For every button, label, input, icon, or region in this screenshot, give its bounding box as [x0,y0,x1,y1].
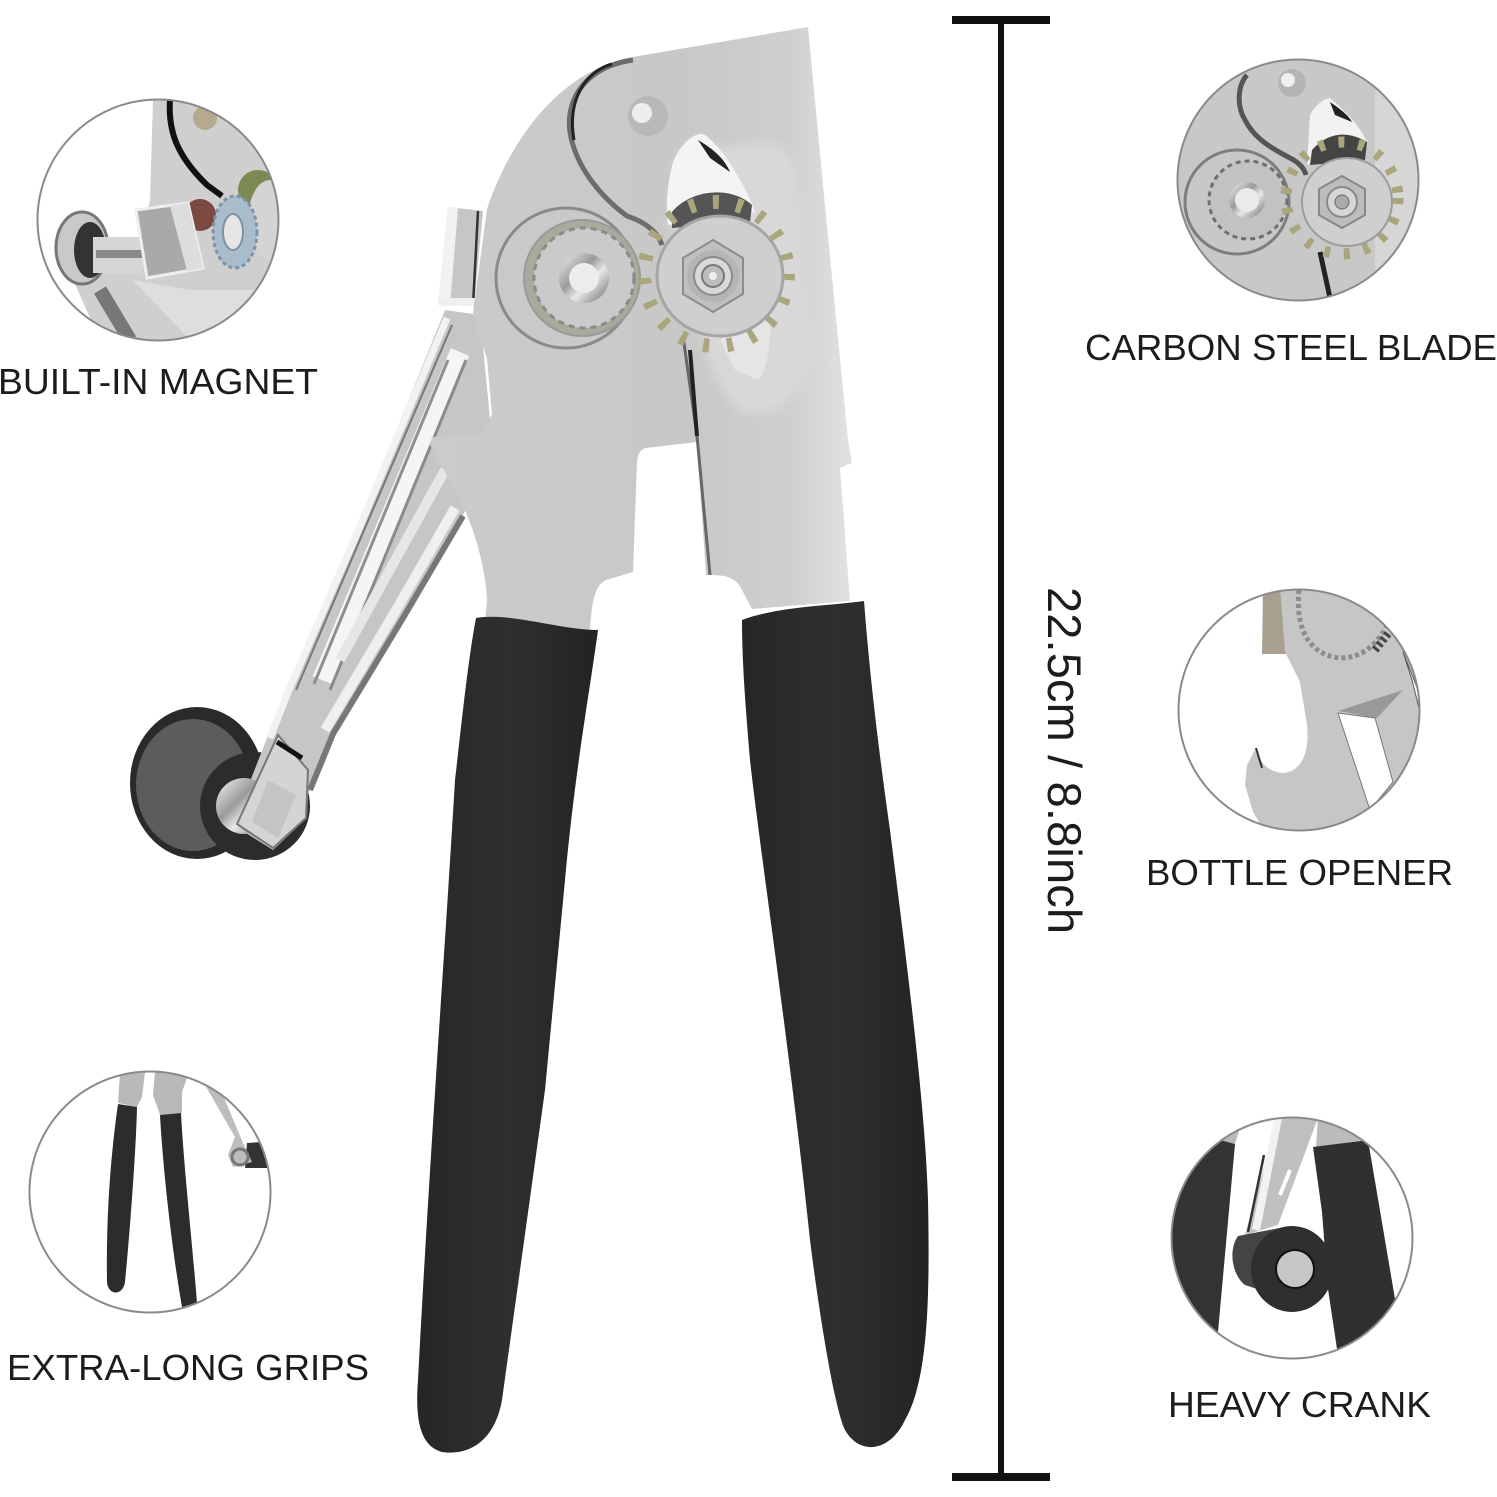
rear gear wheel [496,208,640,348]
crank detail circle [1168,1116,1415,1361]
crank label: HEAVY CRANK [1168,1384,1431,1425]
cutting teeth [644,202,788,346]
dimension line [952,16,1050,1481]
callout: heavy crank [1168,1116,1431,1425]
crank arm [216,310,492,850]
rivet [628,96,668,136]
opener detail circle [1178,588,1425,835]
opener label: BOTTLE OPENER [1146,852,1453,893]
callout: bottle opener [1146,588,1453,893]
right handle grip [742,601,929,1447]
can opener product photo [130,27,929,1453]
blade divider line [683,336,710,575]
callout: extra-long grips [7,1072,369,1388]
cutter recess [667,134,755,225]
steel body [430,27,852,630]
crank knob [130,707,310,860]
raised cutter plate [670,143,813,412]
front cutting wheel [657,216,783,336]
left handle grip [417,617,598,1453]
grips label: EXTRA-LONG GRIPS [7,1347,369,1388]
blade detail circle [1178,60,1420,300]
magnet label: BUILT-IN MAGNET [0,361,318,402]
magnet tab [438,207,483,306]
dimension label: 22.5cm / 8.8inch [1038,587,1091,934]
grips detail circle [30,1072,272,1312]
blade label: CARBON STEEL BLADE [1085,327,1497,368]
callout: carbon steel blade [1085,60,1497,368]
hinge curve [569,60,662,245]
callout: built-in magnet [0,100,318,402]
magnet detail circle [38,100,292,340]
